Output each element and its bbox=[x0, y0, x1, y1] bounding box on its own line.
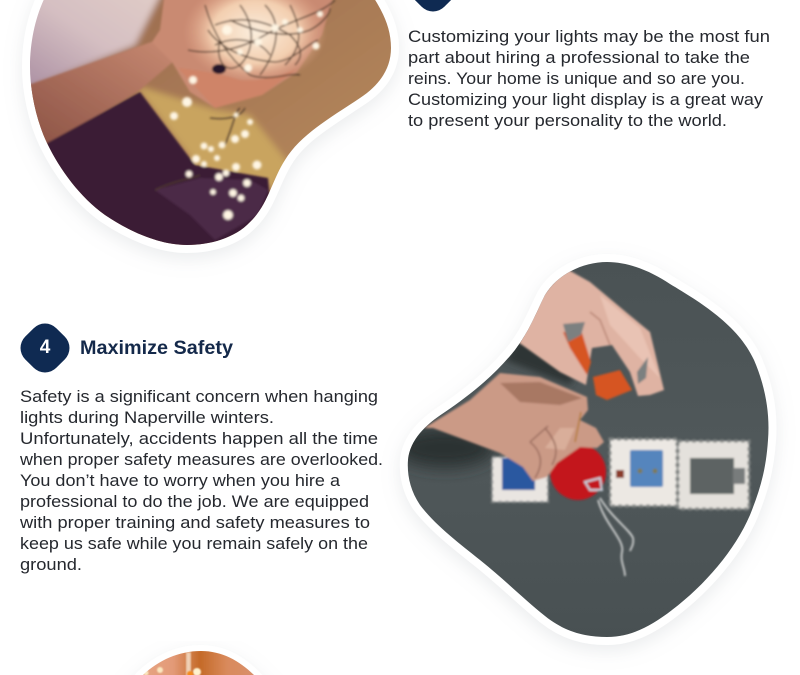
step 4 body text bbox=[19, 388, 383, 574]
wires bbox=[598, 498, 633, 576]
step 4 number badge: 4 bbox=[40, 337, 51, 358]
step 4 heading with badge bbox=[14, 317, 233, 379]
step 3 number badge bbox=[402, 0, 464, 18]
step 4 body text: ground. bbox=[20, 556, 82, 574]
step 4 body text: when proper safety measures are overlooked. bbox=[19, 451, 383, 469]
step 4 body text: Unfortunately, accidents happen all the time bbox=[20, 430, 378, 448]
photo blob: hands wiring electrical sockets bbox=[395, 255, 775, 645]
step 4 body text: Safety is a significant concern when hanging bbox=[20, 388, 378, 406]
electrical photo bbox=[395, 255, 775, 645]
right switch bbox=[678, 441, 749, 509]
step 3 body text: reins. Your home is unique and so are you. bbox=[408, 70, 745, 88]
photo blob: warm orange lights, cropped at bottom bbox=[143, 651, 254, 675]
upper hand bbox=[518, 268, 664, 396]
step 4 body text: You don’t have to worry when you hire a bbox=[20, 472, 341, 490]
step 4 body text: keep us safe while you remain safely on the bbox=[20, 535, 368, 553]
white halo around lights photo bbox=[30, 0, 391, 245]
white halo around orange photo bbox=[125, 651, 275, 675]
white halo around electrical photo bbox=[408, 262, 768, 637]
step 4 body text: lights during Naperville winters. bbox=[20, 409, 274, 427]
step 3 body text: to present your personality to the world. bbox=[408, 112, 727, 130]
red junction box bbox=[550, 444, 606, 500]
orange lights photo bbox=[143, 651, 254, 675]
middle socket bbox=[610, 439, 677, 506]
lower hand bbox=[424, 373, 604, 481]
step 3 body text: Customizing your lights may be the most fun bbox=[408, 28, 770, 46]
step 4 number badge bbox=[14, 317, 76, 379]
step 3 body text bbox=[408, 28, 770, 130]
step 4 heading: Maximize Safety bbox=[80, 338, 233, 359]
step 4 body text: professional to do the job. We are equipped bbox=[20, 493, 369, 511]
step 3 body text: part about hiring a professional to take the bbox=[408, 49, 750, 67]
left socket bbox=[492, 457, 548, 502]
step 3 body text: Customizing your light display is a great way bbox=[408, 91, 764, 109]
step 4 body text: with proper training and safety measures to bbox=[19, 514, 370, 532]
string lights photo bbox=[30, 0, 391, 245]
orange pliers bbox=[563, 332, 591, 375]
wire held in fingers bbox=[575, 412, 581, 442]
photo blob: hands holding string lights bbox=[10, 0, 410, 265]
